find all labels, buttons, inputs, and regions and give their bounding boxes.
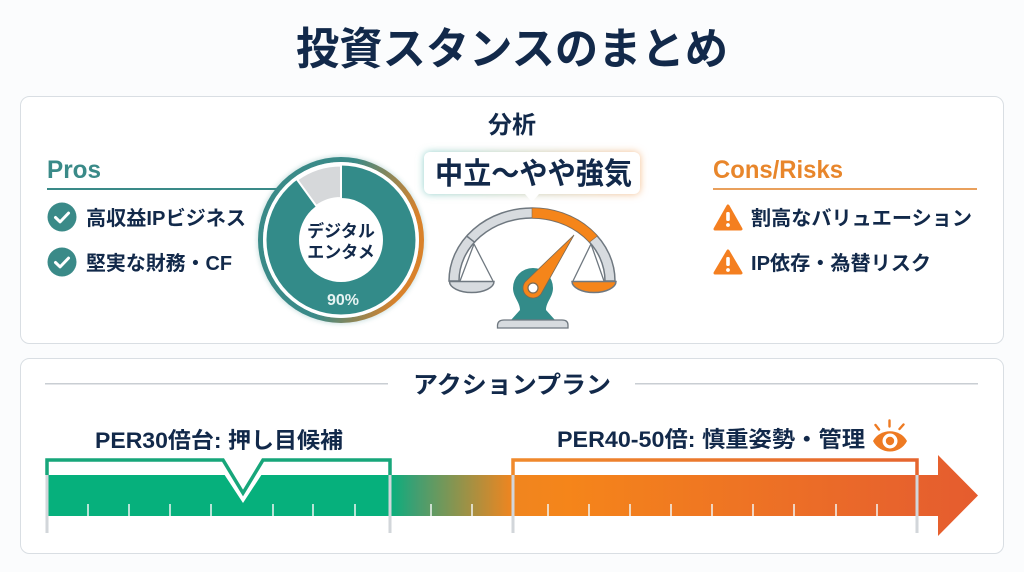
donut chart <box>257 156 425 324</box>
pedestal <box>511 268 555 320</box>
needle hub <box>528 283 538 293</box>
zone posts <box>47 475 917 533</box>
icon: check <box>48 202 76 232</box>
pedestal base <box>498 320 568 328</box>
label: caution zone: PER40-50倍: 慎重姿勢・管理 <box>557 427 865 452</box>
pro item: solid financials <box>48 248 232 276</box>
donut value: 90% <box>327 292 359 309</box>
pro item: high margin IP business <box>48 202 246 232</box>
con text 1: 割高なバリュエーション <box>751 207 972 230</box>
donut centre label <box>307 221 375 262</box>
pros column <box>47 156 282 276</box>
cons rule <box>713 188 977 190</box>
ticks <box>88 504 877 516</box>
con item: IP and FX risk <box>715 251 931 275</box>
icon: check <box>48 248 76 276</box>
con text 2: IP依存・為替リスク <box>751 252 931 275</box>
bracket: buy zone <box>47 460 390 503</box>
panel: action plan <box>20 358 1004 554</box>
pro text 2: 堅実な財務・CF <box>86 252 232 275</box>
label: buy zone: PER30倍台: 押し目候補 <box>95 428 343 453</box>
left pan strands <box>460 244 493 281</box>
needle <box>523 235 574 298</box>
icon: warning <box>715 251 741 273</box>
donut centre label: デジタル <box>307 221 375 241</box>
bracket: caution zone <box>513 460 917 475</box>
arc left divider <box>467 236 474 242</box>
icon: balance scale gauge <box>449 208 616 328</box>
heading: action plan: アクションプラン <box>413 372 611 399</box>
scale arc <box>449 208 615 281</box>
icon: warning <box>715 206 741 229</box>
callout: stance: 中立〜やや強気 <box>435 158 632 191</box>
pro text 1: 高収益IPビジネス <box>86 207 246 230</box>
con item: expensive valuation <box>715 206 972 230</box>
heading: analysis: 分析 <box>488 112 536 139</box>
cons column <box>713 156 977 275</box>
right pan <box>572 282 616 292</box>
title: 投資スタンスのまとめ <box>296 25 728 74</box>
right pan strands <box>573 244 604 281</box>
panel: analysis <box>20 96 1004 344</box>
gray wedge 10% <box>297 165 341 206</box>
timeline arrow <box>47 455 978 536</box>
cons heading: Cons/Risks <box>713 156 843 184</box>
pros rule <box>47 188 282 190</box>
left pan <box>450 282 494 292</box>
arc orange segment <box>532 208 597 242</box>
pros heading: Pros <box>47 156 101 184</box>
icon: eye <box>873 420 907 452</box>
callout: stance <box>424 152 640 202</box>
donut centre label: エンタメ <box>307 243 375 262</box>
